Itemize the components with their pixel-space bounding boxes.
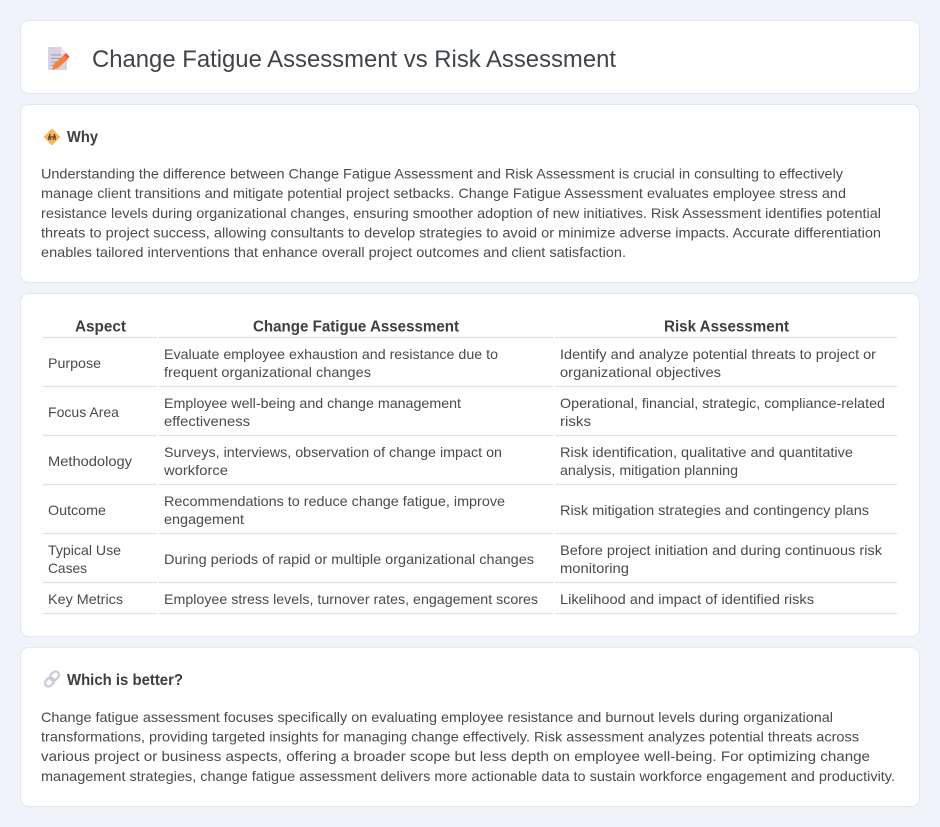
title: Change Fatigue Assessment vs Risk Assessment <box>92 46 616 73</box>
text block: why paragraph: Understanding the difference between Change Fatigue Assessment and Risk Assessment is crucial in consulting to effectively <box>41 166 843 182</box>
icon: diamond warning sign <box>44 128 60 146</box>
text block: why paragraph: manage client transitions and mitigate potential project setbacks. Change Fatigue Assessment evaluates employee stress and <box>41 185 846 201</box>
row: outcome <box>48 493 869 527</box>
row: typical use cases <box>48 542 883 576</box>
row: methodology: workforce <box>163 462 228 478</box>
row: purpose: Evaluate employee exhaustion and resistance due to <box>164 346 498 362</box>
heading: why: Why <box>67 129 98 146</box>
row: focus area: Focus Area <box>48 404 119 420</box>
row: typical use cases: Before project initiation and during continuous risk <box>560 542 883 558</box>
table header: Risk Assessment <box>664 318 790 336</box>
text block: why paragraph: enables tailored interventions that enhance overall project outcomes and client satisfaction. <box>41 244 626 260</box>
text block: which is better paragraph: various project or business aspects, offering a broader scope but less depth on employee well-being. For optimizing change <box>41 748 870 764</box>
table header <box>75 318 790 336</box>
text block: which is better paragraph <box>41 709 895 784</box>
row: focus area: risks <box>560 413 591 429</box>
panel: comparison table <box>20 294 920 636</box>
row: outcome: Risk mitigation strategies and contingency plans <box>560 502 869 518</box>
row: outcome: Recommendations to reduce change fatigue, improve <box>164 493 505 509</box>
text block: why paragraph: threats to project success, allowing consultants to develop strategies to avoid or minimize adverse impacts. Accurate differentiation <box>41 224 881 240</box>
row: typical use cases: monitoring <box>560 560 629 576</box>
text block: which is better paragraph: transformations, providing targeted insights for managing change effectively. Risk assessment analyzes potential threats across <box>41 728 859 744</box>
row: methodology: analysis, mitigation planning <box>560 462 738 478</box>
row: purpose: Identify and analyze potential threats to project or <box>560 346 876 362</box>
text block: which is better paragraph: management strategies, change fatigue assessment delivers more actionable data to sustain workforce engagement and productivity. <box>41 768 895 784</box>
row: outcome: engagement <box>164 511 244 527</box>
row: purpose: frequent organizational changes <box>164 364 371 380</box>
panel: which is better <box>20 648 920 806</box>
text block: why paragraph: resistance levels during organizational changes, ensuring smoother adoption of new initiatives. Risk Assessment identifies potential <box>41 205 881 221</box>
panel: title header <box>20 20 920 94</box>
row: purpose <box>48 346 876 380</box>
heading: which is better: Which is better? <box>67 672 183 689</box>
row: purpose: Purpose <box>48 355 101 371</box>
row: key metrics: Key Metrics <box>48 591 123 607</box>
row: focus area: Operational, financial, strategic, compliance-related <box>560 395 885 411</box>
text block: why paragraph <box>41 166 881 260</box>
row: typical use cases: Cases <box>48 560 87 576</box>
row: outcome: Outcome <box>48 502 106 518</box>
row: key metrics: Likelihood and impact of identified risks <box>560 591 814 607</box>
text block: which is better paragraph: Change fatigue assessment focuses specifically on evaluating employee resistance and burnout levels during organizational <box>41 709 833 725</box>
row: methodology: Methodology <box>48 453 132 469</box>
row: methodology: Risk identification, qualitative and quantitative <box>560 444 853 460</box>
row: purpose: organizational objectives <box>560 364 721 380</box>
row: typical use cases: Typical Use <box>48 542 121 558</box>
row: focus area: effectiveness <box>164 413 250 429</box>
row: key metrics: Employee stress levels, turnover rates, engagement scores <box>164 591 538 607</box>
row: methodology <box>48 444 853 478</box>
table header: Aspect <box>75 318 127 336</box>
row: methodology: Surveys, interviews, observation of change impact on <box>164 444 502 460</box>
row: key metrics <box>48 591 814 607</box>
panel: why <box>20 104 920 282</box>
icon: document with pencil <box>48 47 70 70</box>
row: focus area <box>48 395 885 429</box>
row: focus area: Employee well-being and change management <box>164 395 461 411</box>
row: typical use cases: During periods of rapid or multiple organizational changes <box>164 551 534 567</box>
icon: chain link <box>43 670 61 688</box>
table header: Change Fatigue Assessment <box>253 318 460 336</box>
